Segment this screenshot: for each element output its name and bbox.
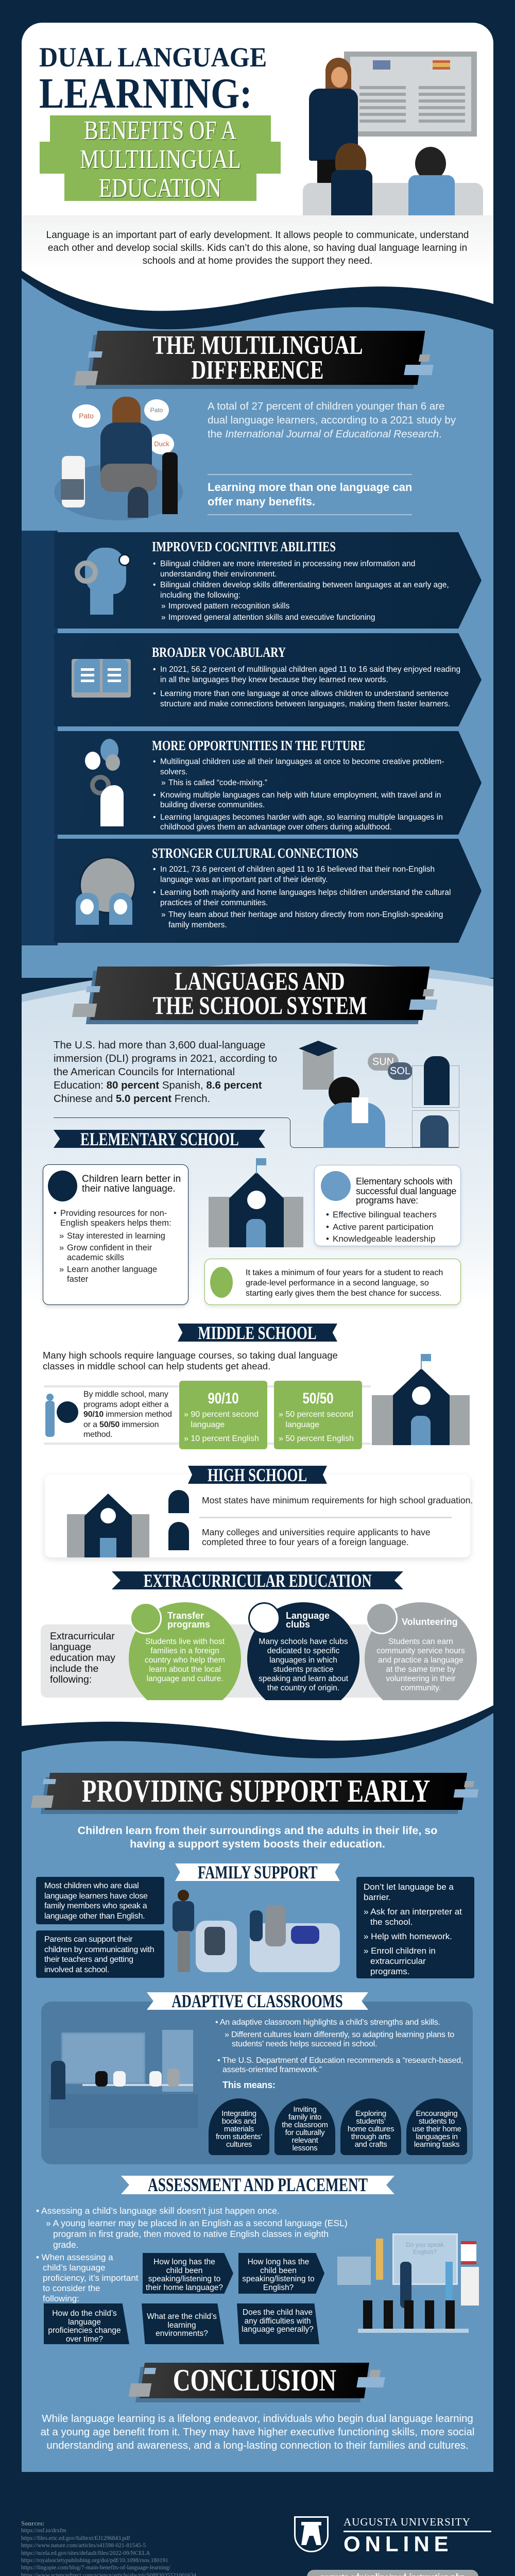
text: What are the child’s learning environments? (147, 2312, 217, 2338)
card: children learn better in native language: Stay interested in learning (67, 1231, 165, 1241)
sources list: https://osf.io/drxfm (21, 2528, 66, 2534)
title: dual language learning (39, 42, 267, 117)
logo: augusta university online (294, 2516, 491, 2556)
box: 50/50: language (285, 1420, 319, 1429)
extracurricular strip (41, 1624, 401, 1698)
panel: stronger cultural connections: They learn about their heritage and history directly from non-English-speaking family members. (168, 910, 443, 929)
circles: what this means: from students’ (216, 2132, 262, 2141)
banner: high school: HIGH SCHOOL (208, 1464, 307, 1485)
immersion row (44, 1385, 371, 1445)
icon: child silhouette (48, 1171, 77, 1201)
circles: what this means (209, 2098, 467, 2155)
circles: what this means: family into (288, 2113, 321, 2122)
box: 50/50: » 50 percent second (279, 1410, 353, 1419)
icon: globe speech bubble (321, 1171, 351, 1201)
text: Extracurricular language education may include the following: (50, 1631, 115, 1685)
banner: languages and the school system (72, 967, 438, 1024)
panel: stronger cultural connections: STRONGER CULTURAL CONNECTIONS (152, 845, 358, 861)
panel: stronger cultural connections: In 2021, 73.6 percent of children aged 11 to 16 believed that their non-English language was an important part of their identity. (160, 865, 435, 884)
text: adaptive classroom bullets: This means: (222, 2080, 276, 2090)
blue support section background (22, 1766, 493, 2472)
box: 50/50: 50/50 (302, 1390, 334, 1407)
box: close family members: Most children who are dual language learners have close family members who speak a language other than English. (44, 1882, 148, 1921)
circles: what this means: use their home (412, 2125, 461, 2133)
circles: what this means: home cultures (348, 2125, 394, 2133)
icon: head with speech bubbles (85, 739, 124, 826)
panel: broader vocabulary (54, 633, 482, 726)
title: dual language learning: LEARNING: (39, 70, 252, 117)
sources list: https://lingopie.com/blog/7-main-benefits-of-language-learning/ (21, 2565, 170, 2571)
oval: language clubs: clubs (286, 1619, 310, 1630)
illustration: teacher at board with students (303, 52, 483, 215)
box: don't let language be a barrier: » Ask for an interpreter at the school. (364, 1907, 462, 1927)
oval: language clubs: Many schools have clubs dedicated to specific languages in which students practice speaking and learn about the country of origin. (259, 1637, 348, 1692)
adaptive classrooms panel (41, 2002, 473, 2164)
circles: what this means: the classroom (282, 2121, 328, 2129)
illustration: teacher with kids and speech bubbles: Pato (79, 412, 94, 420)
card: children learn better in native language: Children learn better in their native language. (82, 1174, 181, 1194)
card: high school: Many colleges and universities require applicants to have completed three to four years of a foreign language. (202, 1527, 431, 1547)
panel: broader vocabulary: Learning more than one language at once allows children to understand sentence structure and make connections between languages, making them faster learners. (160, 689, 450, 708)
icon: head with gear (75, 548, 131, 615)
circles: what this means: students’ (356, 2117, 386, 2126)
banner: family support (175, 1863, 340, 1881)
circles: what this means: materials (224, 2125, 254, 2133)
card: successful dual language programs (314, 1165, 461, 1246)
panel: improved cognitive abilities: Improved general attention skills and executive functioning (168, 613, 375, 621)
sources list: https://ncela.ed.gov/sites/default/files/2022-09/NCELA (21, 2550, 150, 2556)
bottom wave (22, 2458, 493, 2509)
oval: language clubs: Language (286, 1611, 330, 1621)
panel: stronger cultural connections (54, 839, 482, 943)
card: children learn better in native language (43, 1164, 188, 1305)
panel: improved cognitive abilities: Bilingual children develop skills differentiating between languages at an early age, including the following: (160, 581, 449, 600)
oval: transfer programs: programs (167, 1619, 210, 1630)
box: don't let language be a barrier: » Help with homework. (364, 1931, 452, 1941)
text: Does the child have any difficulties with language generally? (242, 2308, 314, 2334)
text: adaptive classroom bullets: • An adaptive classroom highlights a child’s strengths and skills. (215, 2018, 440, 2027)
chevron questions: How long has the child been speaking/listening to their home language? (146, 2258, 223, 2292)
text: adaptive classroom bullets: • The U.S. Department of Education recommends a “research-based, assets-oriented framework.” (217, 2056, 463, 2074)
banner: languages and the school system: LANGUAGES AND (175, 967, 345, 995)
panel: more opportunities in the future: This is called “code-mixing.” (168, 778, 267, 787)
light section background (school system) (22, 963, 493, 1014)
panel: more opportunities in the future (54, 731, 482, 835)
banner: elementary school (54, 1130, 265, 1148)
card: children learn better in native language: Grow confident in their academic skills (67, 1243, 152, 1262)
panel: more opportunities in the future: Learning languages becomes harder with age, so learning multiple languages in childhood gives them an advantage over others during adulthood. (160, 813, 443, 832)
icon: student with book (45, 1394, 78, 1437)
illustration: teacher with kids and speech bubbles: Duck (154, 440, 169, 448)
box: close family members (36, 1877, 164, 1924)
illustration: elementary school building (209, 1158, 303, 1247)
icon: green star figure (210, 1267, 233, 1298)
banner: the multilingual difference (74, 331, 434, 389)
subtitle: benefits of a multilingual education (green blocks): BENEFITS OF A (84, 116, 236, 145)
illustration: middle school building (372, 1354, 470, 1445)
text: middle school intro: Many high schools require language courses, so taking dual language classes in middle school can help students get ahead. (43, 1350, 338, 1371)
card: children learn better in native language: Learn another language faster (67, 1265, 157, 1284)
text: How long has the child been speaking/listening to English? (242, 2258, 315, 2292)
circles: what this means: cultures (226, 2140, 252, 2149)
icon: graduate (168, 1490, 189, 1513)
logo: augusta university online: AUGUSTA UNIVERSITY (344, 2516, 471, 2528)
circles: what this means: Encouraging (416, 2109, 457, 2118)
left darker stripe behind benefit panels (22, 531, 58, 945)
circles: what this means: Inviting (293, 2105, 317, 2114)
panel: improved cognitive abilities: Bilingual children are more interested in processing new information and understanding their environment. (160, 560, 415, 578)
text: when assessing: • When assessing a child’s language proficiency, it’s important to consider the following: (36, 2252, 138, 2303)
stat text: 3,600 DLI programs: The U.S. had more than 3,600 dual-language immersion (DLI) programs in 2021, according to the American Councils for International Education: 80 percent Spanish, 8.6 percent Chinese and 5.0 percent French. (54, 1039, 277, 1105)
illustration: teacher with SUN/SOL card and video-call students (299, 1041, 459, 1148)
illustration: classroom with teacher (51, 2030, 193, 2099)
banner: elementary school: ELEMENTARY SCHOOL (80, 1128, 238, 1149)
banner: assessment and placement: ASSESSMENT AND PLACEMENT (148, 2174, 368, 2196)
illustration: teacher with SUN/SOL card and video-call students: SOL (390, 1065, 410, 1077)
circles: what this means: Integrating (221, 2109, 256, 2118)
icon: shield (294, 2516, 329, 2552)
icon: person with languages (168, 1522, 189, 1550)
banner: the multilingual difference: DIFFERENCE (192, 355, 323, 384)
text: assessment bullets: » A young learner may be placed in an English as a second language (ESL) program in first grade, then moved to native English classes in eighth grade. (46, 2218, 348, 2250)
subtitle: benefits of a multilingual education (green blocks): MULTILINGUAL (80, 145, 241, 174)
circles: what this means: books and (222, 2117, 256, 2126)
panel: more opportunities in the future: Knowing multiple languages can help with future employment, with travel and in building diverse communities. (160, 790, 441, 809)
banner: middle school: MIDDLE SCHOOL (198, 1322, 317, 1343)
text: support intro: Children learn from their surroundings and the adults in their life, so having a support system boosts their education. (78, 1824, 437, 1850)
url pill (307, 2570, 478, 2576)
panel: broader vocabulary: BROADER VOCABULARY (152, 645, 286, 660)
box: 90/10 (179, 1381, 267, 1449)
card: high school: Most states have minimum requirements for high school graduation. (202, 1495, 473, 1505)
illustration: teacher with kids and speech bubbles: Pato (150, 406, 163, 414)
box: don't let language be a barrier (356, 1877, 474, 1978)
banner: family support: FAMILY SUPPORT (198, 1862, 317, 1883)
circles: what this means: and crafts (355, 2140, 387, 2149)
oval: language clubs (247, 1602, 359, 1715)
text: by middle school: By middle school, many programs adopt either a 90/10 immersion method or a 50/50 immersion method. (83, 1390, 172, 1439)
banner: extracurricular education: EXTRACURRICULAR EDUCATION (144, 1570, 371, 1591)
stat text: 27 percent: A total of 27 percent of children younger than 6 are dual language learners, according to a 2021 study by the International Journal of Educational Research. (208, 400, 456, 440)
box: 90/10: 90/10 (208, 1390, 239, 1407)
logo: augusta university online: ONLINE (344, 2532, 453, 2556)
banner: conclusion: CONCLUSION (173, 2363, 336, 2397)
panel: improved cognitive abilities: IMPROVED COGNITIVE ABILITIES (152, 539, 336, 554)
box: 50/50 (274, 1381, 362, 1449)
subtitle: benefits of a multilingual education (green blocks) (40, 115, 281, 203)
oval: volunteering (365, 1602, 477, 1715)
white header card (22, 23, 493, 311)
box: 90/10: » 90 percent second (184, 1410, 259, 1419)
card: successful dual language programs: Effective bilingual teachers (333, 1210, 437, 1219)
oval: transfer programs: Students live with host families in a foreign country who help them learn about the local language and culture. (145, 1637, 225, 1683)
wave divider to support section (22, 1700, 493, 1766)
icon: open book (72, 659, 131, 698)
panel: more opportunities in the future: MORE OPPORTUNITIES IN THE FUTURE (152, 738, 365, 753)
title: dual language learning: DUAL LANGUAGE (39, 42, 267, 73)
circles: what this means: lessons (293, 2144, 317, 2153)
panel: more opportunities in the future: Multilingual children use all their languages at once to become creative problem-solvers. (160, 757, 444, 776)
card: four years to grade-level (204, 1259, 461, 1305)
circles: what this means: students to (419, 2117, 455, 2126)
banner: adaptive classrooms: ADAPTIVE CLASSROOMS (172, 1991, 343, 2011)
circles: what this means: relevant (292, 2136, 318, 2145)
oval: transfer programs: Transfer (167, 1611, 204, 1621)
text: assessment bullets: • Assessing a child’s language skill doesn’t just happen once. (36, 2206, 280, 2216)
illustration: teacher with SUN/SOL card and video-call students: SUN (372, 1056, 394, 1067)
illustration: teacher with kids and speech bubbles (54, 397, 183, 520)
text: assessment bullets (36, 2206, 348, 2250)
intro text block: Language is an important part of early development. It allows people to communicate, understand each other and develop social skills. Kids can’t do this alone, so having dual language learning in schools and at home provides the support they need. (46, 230, 469, 266)
icon: globe with people (76, 857, 136, 925)
sources list: Sources: (21, 2520, 45, 2527)
oval: volunteering: Students can earn community service hours and practice a language at the same time by volunteering in their community. (376, 1637, 465, 1692)
sources list: https://royalsocietypublishing.org/doi/pdf/10.1098/rsos.180191 (21, 2557, 168, 2564)
circles: what this means: through arts (351, 2132, 390, 2141)
text: adaptive classroom bullets (215, 2018, 463, 2090)
panel: improved cognitive abilities: Improved pattern recognition skills (168, 602, 289, 611)
sources list (21, 2520, 196, 2576)
box: 90/10: » 10 percent English (184, 1434, 259, 1443)
panel: broader vocabulary: In 2021, 56.2 percent of multilingual children aged 11 to 16 said they enjoyed reading in all the languages they knew because they learned new words. (160, 665, 460, 684)
banner: languages and the school system: THE SCHOOL SYSTEM (152, 991, 367, 1020)
box: don't let language be a barrier: » Enroll children in extracurricular programs. (364, 1946, 436, 1976)
sources list: https://files.eric.ed.gov/fulltext/EJ1296843.pdf (21, 2535, 130, 2541)
circles: what this means: Exploring (355, 2109, 386, 2118)
banner: conclusion (129, 2363, 385, 2402)
banner: providing support early: PROVIDING SUPPORT EARLY (82, 1773, 430, 1808)
subtitle: benefits of a multilingual education (green blocks): EDUCATION (99, 174, 221, 203)
text: How do the child’s language proficiencies change over time? (48, 2309, 121, 2343)
box: 90/10: language (191, 1420, 225, 1429)
text: adaptive classroom bullets: » Different cultures learn differently, so adapting learning plans to students’ needs helps succeed in school. (225, 2030, 454, 2048)
illustration: ESL classroom: Do you speak English? (406, 2241, 444, 2256)
card: successful dual language programs: Knowledgeable leadership (333, 1234, 435, 1244)
panel: stronger cultural connections: Learning both majority and home languages helps children understand the cultural practices of their communities. (160, 888, 451, 907)
callout: learning more than one language: Learning more than one language can offer many benefits. (208, 481, 412, 508)
oval: transfer programs (129, 1602, 241, 1715)
wave divider (22, 270, 493, 334)
text: conclusion: While language learning is a lifelong endeavor, individuals who begin dual language learning at a young age benefit from it. They may have higher executive functioning skills, more social understanding and awareness, and a long-lasting connection to their families and cultures. (41, 2413, 474, 2451)
card: high school (45, 1475, 470, 1557)
panel: improved cognitive abilities (54, 532, 482, 629)
banner: the multilingual difference: THE MULTILINGUAL (152, 331, 363, 360)
connector line (54, 1117, 290, 1134)
card: children learn better in native language: Providing resources for non-English speakers helps them: (60, 1209, 171, 1228)
circles: what this means: languages in (416, 2132, 458, 2141)
card: successful dual language programs: Active parent participation (333, 1222, 434, 1231)
box: 50/50: » 50 percent English (279, 1434, 354, 1443)
banner: middle school (178, 1324, 337, 1342)
oval: volunteering: Volunteering (402, 1617, 458, 1627)
illustration: family on sofa (173, 1890, 340, 1972)
banner: adaptive classrooms (147, 1992, 368, 2010)
circles: what this means: for culturally (285, 2128, 324, 2137)
box: don't let language be a barrier: Don’t let language be a barrier. (364, 1882, 454, 1902)
illustration: ESL classroom (337, 2233, 479, 2333)
banner: providing support early (31, 1773, 479, 1814)
illustration: high school building (67, 1494, 149, 1557)
card: successful dual language programs: Elementary schools with successful dual language programs have: (356, 1176, 456, 1206)
box: parents can support: Parents can support their children by communicating with their teachers and getting involved at school. (44, 1935, 154, 1974)
sources list: https://www.nature.com/articles/s41598-021-81545-5 (21, 2543, 146, 2549)
blue section background (22, 334, 493, 978)
card: four years to grade-level: It takes a minimum of four years for a student to reach grade-level performance in a second language, so starting early gives them the best chance for success. (246, 1268, 443, 1298)
banner: high school (188, 1466, 327, 1484)
circles: what this means: learning tasks (414, 2140, 459, 2149)
intro text block (22, 215, 493, 272)
